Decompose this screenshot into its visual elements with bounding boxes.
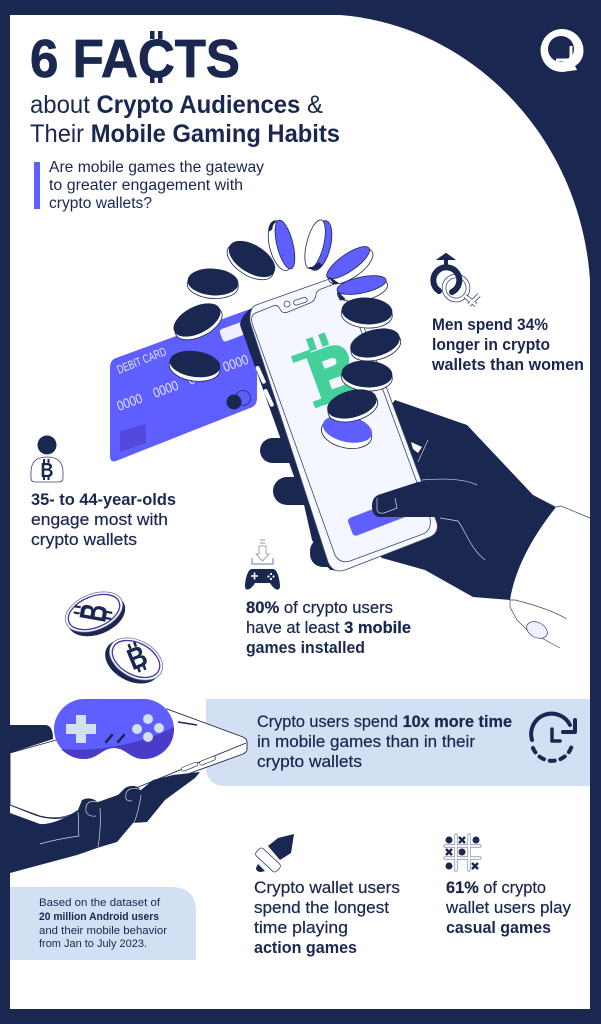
fact: age [31,490,176,549]
icon: tic tac toe [445,835,480,870]
coin 5 and 6 edge marks [329,277,345,300]
shirt cuff [510,506,590,648]
icon: person bitcoin [31,436,63,482]
horizontal phone with hand [10,709,247,873]
intro question: crypto wallets? [49,195,152,212]
intro question [34,159,264,212]
fact: men [431,315,584,374]
source note [10,887,196,960]
bitcoin coin 1 [59,584,131,645]
fact: age: crypto wallets [31,530,137,549]
debit card [110,309,257,461]
coin 9 [341,360,393,392]
fact: casual games: wallet users play [445,898,571,917]
coin 11 [319,411,375,453]
coin 1 [186,267,239,300]
fact: installed games: games installed [246,638,365,657]
hand holding phone [260,400,556,600]
intro question: to greater engagement with [49,177,243,194]
subtitle [30,91,340,148]
light band [206,699,590,786]
debit card: 0000 [221,351,251,375]
fact: men: wallets than women [431,355,584,374]
coin 10 [324,385,381,427]
fact: installed games [246,598,411,657]
debit card: 0000 [151,377,181,401]
coin 7 [341,297,393,329]
coin 3 [264,218,299,273]
fact: action games: Crypto wallet users [254,878,400,897]
coin 13 [167,348,222,384]
fact: action games: action games [254,938,357,957]
subtitle: about Crypto Audiences & [30,91,323,119]
fact: ten times: crypto wallets [257,752,362,771]
phone with bitcoin [240,276,437,571]
holding hand [10,772,200,873]
subtitle: Their Mobile Gaming Habits [30,120,340,148]
bitcoin symbol: B [299,328,369,419]
fact: age: 35- to 44-year-olds [31,490,176,509]
title: 6 FACTS [30,29,240,89]
icon: game download [245,540,280,590]
coin 6 [335,272,390,306]
fact: men: Men spend 34% [432,315,548,334]
source note: Based on the dataset of [39,897,161,909]
debit card: 0000 [186,364,216,388]
fact: ten times: in mobile games than in their [257,732,475,751]
fact: ten times [257,712,512,771]
source note: and their mobile behavior [39,925,167,937]
thumb [372,440,485,560]
fact: men: longer in crypto [432,335,550,354]
source note: from Jan to July 2023. [39,938,147,950]
icon: sword [254,834,294,873]
bitcoin coin 1: B [71,600,116,625]
icon: person bitcoin: B [40,460,54,482]
coin 5 [322,241,378,290]
falling coins [167,217,404,453]
fact: action games: time playing [254,918,348,937]
coin 2 [221,234,281,287]
fact: installed games: 80% of crypto users [246,598,393,617]
bitcoin coin 2 [98,628,170,693]
fact: age: engage most with [31,510,168,529]
purple button [347,497,412,537]
fact: casual games: casual games [446,918,551,937]
source note: 20 million Android users [39,911,159,923]
coin 8 [347,324,404,366]
fact: casual games: 61% of crypto [446,878,546,897]
fact: action games [254,878,400,957]
logo [541,29,584,72]
fact: installed games: have at least 3 mobile [246,618,411,637]
debit card: 0000 [115,390,145,414]
fact: ten times: Crypto users spend 10x more time [257,712,512,731]
icon: clock [531,714,575,761]
coin 12 [168,297,227,347]
intro question: Are mobile games the gateway [49,159,264,176]
gender icon [433,254,479,305]
bitcoin coin 2: B [122,639,152,676]
fact: casual games [445,878,571,937]
fact: action games: spend the longest [254,898,389,917]
coin 4 [301,217,336,273]
gamepad [54,699,174,759]
debit card: DEBIT CARD [115,344,169,377]
